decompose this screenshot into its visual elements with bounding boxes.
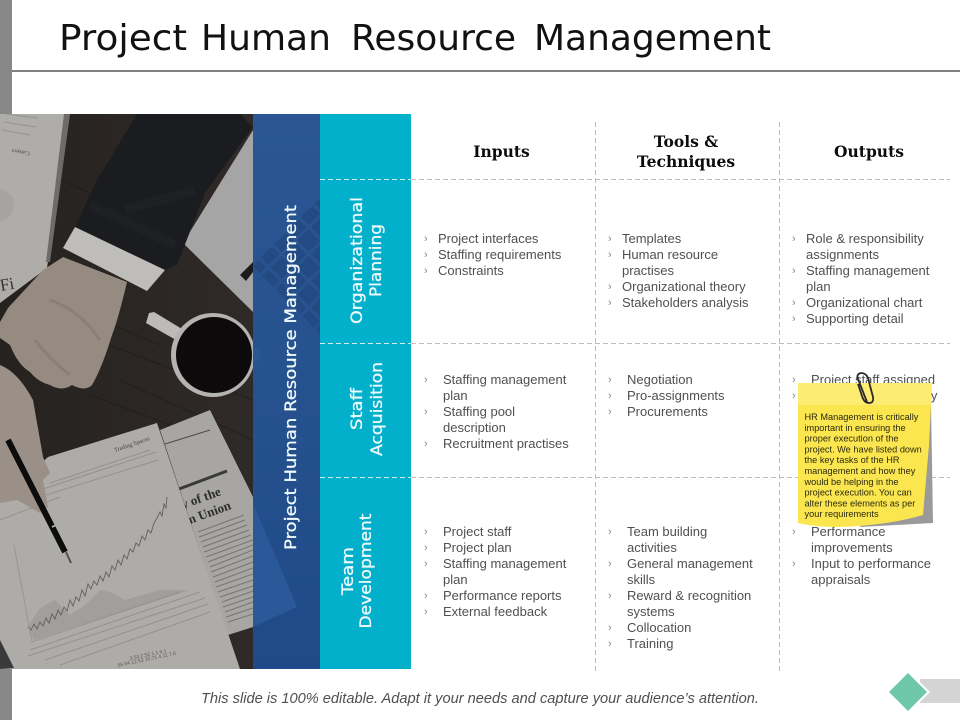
front newspaper with chart: [0, 423, 240, 669]
outputs: team development: improvements: [811, 540, 893, 555]
outputs: organizational planning: ›: [792, 313, 796, 325]
tools: team development: ›: [608, 526, 612, 538]
tools: team development: Team building: [627, 524, 707, 539]
inputs: team development: [424, 524, 567, 619]
tools: team development: Training: [627, 636, 673, 651]
inputs: organizational planning: Staffing requirements: [438, 247, 562, 262]
outputs: organizational planning: ›: [792, 297, 796, 309]
inputs: team development: External feedback: [443, 604, 548, 619]
photo: businessman at desk with charts: Careers: [11, 147, 30, 156]
stage: team development: Team: [338, 547, 357, 596]
hand: [0, 257, 127, 388]
column headers: Techniques: [637, 152, 735, 171]
keyboard pattern: [253, 198, 320, 334]
inputs: team development: ›: [424, 542, 428, 554]
inputs: staff acquisition: ›: [424, 406, 428, 418]
tools: organizational planning: [608, 231, 749, 310]
stage: staff acquisition: Staff: [347, 387, 366, 430]
tools: staff acquisition: Procurements: [627, 404, 708, 419]
column headers: [473, 132, 904, 171]
footer note: This slide is 100% editable. Adapt it your needs and capture your audience’s attention.: [201, 691, 759, 707]
stage: organizational planning: Planning: [366, 224, 385, 297]
tools: organizational planning: ›: [608, 249, 612, 261]
photo: businessman at desk with charts: 55.94 12.53 10.71 4.11 7.6: [117, 651, 177, 669]
inputs: team development: Staffing management: [443, 556, 567, 571]
panel: cyan stage column: [320, 114, 411, 669]
inputs: team development: plan: [443, 572, 468, 587]
callout: sticky note: [798, 373, 933, 527]
callout text: would be helping in the: [804, 477, 898, 487]
panel: blue process column: [253, 114, 320, 669]
icon: navigation diamond tab: [886, 670, 960, 714]
column headers: Outputs: [834, 142, 904, 161]
tools: team development: systems: [627, 604, 675, 619]
tools: staff acquisition: ›: [608, 374, 612, 386]
inputs: staff acquisition: [424, 372, 569, 451]
outputs: team development: ›: [792, 558, 796, 570]
tools: organizational planning: ›: [608, 281, 612, 293]
back newspaper: [160, 410, 253, 635]
callout text: project execution. You can: [804, 488, 912, 498]
title: Human: [201, 18, 331, 59]
inputs: team development: Project staff: [443, 524, 512, 539]
tools: staff acquisition: Pro-assignments: [627, 388, 725, 403]
inputs: staff acquisition: plan: [443, 388, 468, 403]
outputs: organizational planning: Role & responsibility: [806, 231, 924, 246]
inputs: organizational planning: Constraints: [438, 263, 504, 278]
photo: businessman at desk with charts: Trading Spaces: [114, 436, 151, 454]
title: Project: [59, 18, 187, 59]
outputs: organizational planning: Organizational chart: [806, 295, 923, 310]
inputs: staff acquisition: Staffing management: [443, 372, 567, 387]
tools: team development: General management: [627, 556, 753, 571]
title: [59, 18, 771, 59]
tools: organizational planning: ›: [608, 297, 612, 309]
tools: staff acquisition: [608, 372, 725, 419]
outputs: organizational planning: assignments: [806, 247, 879, 262]
tools: team development: Reward & recognition: [627, 588, 751, 603]
tools: team development: ›: [608, 558, 612, 570]
tools: team development: activities: [627, 540, 677, 555]
stage: organizational planning: Organizational: [347, 197, 366, 324]
laptop / white paper: [183, 130, 253, 312]
callout text: the key tasks of the HR: [804, 455, 900, 465]
outputs: team development: [792, 524, 931, 587]
suit sleeve: [75, 114, 253, 270]
tools: team development: ›: [608, 638, 612, 650]
callout text: HR Management is critically: [804, 412, 919, 422]
stage: organizational planning: [347, 197, 385, 324]
inputs: organizational planning: ›: [424, 249, 428, 261]
inputs: organizational planning: [424, 231, 562, 278]
inputs: staff acquisition: Staffing pool: [443, 404, 515, 419]
callout text: important in ensuring the: [804, 423, 906, 433]
photo: businessman at desk with charts: [0, 114, 255, 669]
stage: staff acquisition: [347, 362, 386, 456]
column headers: Tools &: [654, 132, 718, 151]
outputs: staff acquisition: [792, 372, 938, 403]
tools: team development: ›: [608, 622, 612, 634]
tools: team development: [608, 524, 753, 651]
inputs: team development: ›: [424, 558, 428, 570]
outputs: team development: Performance: [811, 524, 885, 539]
stage: team development: Development: [356, 514, 375, 628]
tools: team development: skills: [627, 572, 656, 587]
shirt cuff: [63, 227, 165, 291]
tools: organizational planning: Stakeholders analysis: [622, 295, 749, 310]
callout text: [804, 412, 922, 519]
tools: organizational planning: ›: [608, 233, 612, 245]
column headers: Inputs: [473, 142, 530, 161]
outputs: organizational planning: Staffing management: [806, 263, 930, 278]
photo: businessman at desk with charts: y of the: [179, 484, 223, 512]
inputs: organizational planning: Project interfaces: [438, 231, 539, 246]
inputs: team development: ›: [424, 526, 428, 538]
outputs: organizational planning: ›: [792, 265, 796, 277]
callout text: proper execution of the: [804, 434, 898, 444]
tools: team development: Collocation: [627, 620, 691, 635]
inputs: team development: Project plan: [443, 540, 512, 555]
stage: staff acquisition: Acquisition: [367, 362, 386, 456]
inputs: staff acquisition: description: [443, 420, 506, 435]
inputs: team development: ›: [424, 590, 428, 602]
outputs: staff acquisition: ›: [792, 390, 796, 402]
callout text: project. We have listed down: [804, 444, 922, 454]
top-left document: [0, 114, 70, 303]
callout text: management and how they: [804, 466, 916, 476]
price chart: [14, 497, 190, 642]
coffee cup: [146, 312, 255, 397]
outputs: organizational planning: [792, 231, 930, 326]
tools: staff acquisition: ›: [608, 390, 612, 402]
tools: organizational planning: Organizational theory: [622, 279, 746, 294]
stage: team development: [338, 514, 375, 628]
lower left dark edge: [0, 640, 14, 669]
title rule: [12, 70, 960, 72]
callout text: alter these elements as per: [804, 498, 915, 508]
inputs: organizational planning: ›: [424, 265, 428, 277]
outputs: team development: appraisals: [811, 572, 871, 587]
outputs: team development: ›: [792, 526, 796, 538]
tools: staff acquisition: Negotiation: [627, 372, 693, 387]
title: Resource: [351, 18, 516, 59]
photo: businessman at desk with charts: n Union: [186, 497, 234, 527]
title: Management: [534, 18, 771, 59]
tools: organizational planning: Templates: [622, 231, 682, 246]
outputs: staff acquisition: Project staff assigned: [811, 372, 935, 387]
column title: Project Human Resource Management: [281, 205, 300, 550]
inputs: staff acquisition: ›: [424, 438, 428, 450]
tools: staff acquisition: ›: [608, 406, 612, 418]
outputs: organizational planning: ›: [792, 233, 796, 245]
outputs: staff acquisition: ›: [792, 374, 796, 386]
tools: organizational planning: Human resource: [622, 247, 718, 262]
left grey accent bar: [0, 0, 12, 720]
pointing hand: [0, 365, 50, 513]
tools: team development: ›: [608, 590, 612, 602]
inputs: staff acquisition: ›: [424, 374, 428, 386]
inputs: organizational planning: ›: [424, 233, 428, 245]
tools: organizational planning: practises: [622, 263, 675, 278]
photo: businessman at desk with charts: 3.53 2.52 1.1 6.1: [129, 648, 167, 662]
outputs: organizational planning: plan: [806, 279, 831, 294]
outputs: team development: Input to performance: [811, 556, 931, 571]
outputs: staff acquisition: Project team directory: [811, 388, 938, 403]
inputs: team development: ›: [424, 606, 428, 618]
inputs: staff acquisition: Recruitment practises: [443, 436, 569, 451]
callout text: your requirements: [804, 509, 879, 519]
inputs: team development: Performance reports: [443, 588, 562, 603]
icon: paperclip: [857, 373, 873, 403]
outputs: organizational planning: Supporting detail: [806, 311, 904, 326]
fountain pen: [8, 440, 71, 563]
